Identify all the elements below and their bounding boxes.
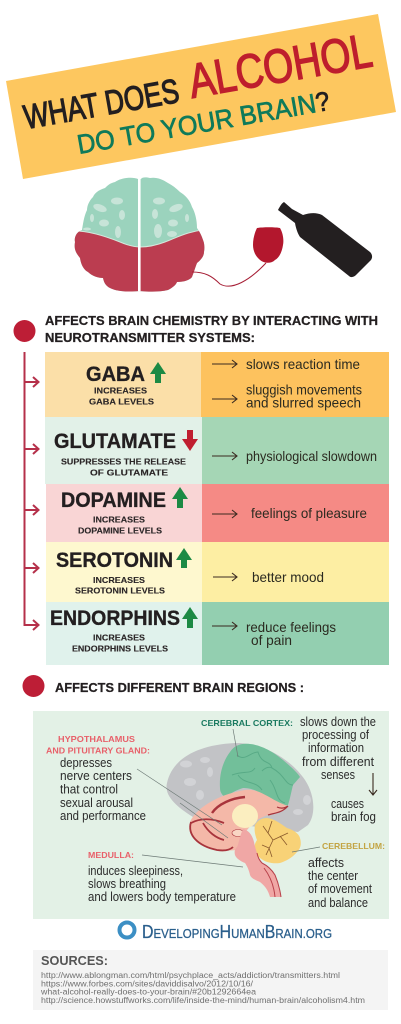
effect <box>213 573 237 581</box>
panel: GABA: and slurred speech <box>246 394 361 410</box>
panel: ENDORPHINS: reduce feelings <box>246 619 336 635</box>
name: ENDORPHINS <box>50 607 180 630</box>
label: hypothalamus: AND PITUITARY GLAND: <box>46 746 150 756</box>
name: DOPAMINE <box>61 489 166 512</box>
cerebral cortex <box>220 744 300 806</box>
text: cortex effect: processing of <box>302 728 369 742</box>
section dot 1 <box>14 320 36 342</box>
brain stem <box>235 829 281 897</box>
section dot 2 <box>22 675 44 697</box>
text: hypothalamus effect: and performance <box>60 809 146 823</box>
icon: up arrow <box>172 487 188 508</box>
icon: down arrow <box>182 430 198 451</box>
description: SUPPRESSES THE RELEASE <box>61 456 186 466</box>
limbic system <box>190 790 288 850</box>
description: INCREASES <box>93 575 145 585</box>
icon: brain <box>74 177 204 292</box>
sources list: http://science.howstuffworks.com/life/inside-the-mind/human-brain/alcoholism4.htm <box>41 996 365 1005</box>
label: medulla: MEDULLA: <box>88 850 134 860</box>
panel: SEROTONIN: better mood <box>252 569 324 585</box>
brain diagram <box>167 743 313 897</box>
panel: GABA: sluggish movements <box>246 382 362 398</box>
text: cerebellum effect: the center <box>308 869 358 883</box>
text: cortex effect: slows down the <box>300 715 376 729</box>
text: cortex effect: brain fog <box>331 810 376 824</box>
effects <box>212 360 237 403</box>
panel: ENDORPHINS: of pain <box>251 632 292 648</box>
thalamus <box>232 804 258 828</box>
description: ENDORPHINS LEVELS <box>72 644 168 654</box>
outer brain <box>167 743 313 832</box>
sources list: http://www.ablongman.com/html/psychplace_acts/addiction/transmitters.html <box>41 971 340 980</box>
panel: GLUTAMATE: physiological slowdown <box>246 448 377 464</box>
sources list: https://www.forbes.com/sites/daviddisalvo/2012/10/16/ <box>41 980 254 988</box>
panel: GABA <box>45 352 389 417</box>
icon: up arrow <box>182 607 198 628</box>
arrow: leads to brain fog <box>369 773 377 795</box>
panel: sources <box>33 950 388 1010</box>
name: SEROTONIN <box>56 549 173 572</box>
name: GLUTAMATE <box>54 430 176 453</box>
icon: wine glass <box>253 227 283 263</box>
pointer lines <box>137 729 320 867</box>
label: hypothalamus: HYPOTHALAMUS <box>58 734 135 744</box>
panel: DOPAMINE <box>46 484 389 542</box>
description: GABA LEVELS <box>89 396 154 406</box>
sources list: what-alcohol-really-does-to-your-brain/#20b1292664ea <box>40 988 257 996</box>
icon: tube <box>192 263 266 286</box>
title line: do to your brain: DO TO YOUR BRAIN? <box>75 86 332 160</box>
icon: up arrow <box>176 548 192 568</box>
text: cortex effect: senses <box>321 768 355 782</box>
sources heading: SOURCES: <box>41 953 108 968</box>
title banner <box>6 14 396 179</box>
text: hypothalamus effect: sexual arousal <box>60 796 133 810</box>
text: medulla effect: and lowers body temperature <box>88 890 236 904</box>
panel: ENDORPHINS <box>46 602 389 665</box>
text: cerebellum effect: affects <box>308 856 344 870</box>
panel: DOPAMINE: feelings of pleasure <box>251 505 367 521</box>
panel: GLUTAMATE <box>45 417 389 484</box>
panel: brain regions <box>33 711 389 919</box>
icon: wine bottle <box>278 202 372 277</box>
title line: what does: WHAT DOES <box>21 72 182 137</box>
text: cortex effect: from different <box>302 755 375 769</box>
text: medulla effect: induces sleepiness, <box>88 864 183 878</box>
text: hypothalamus effect: depresses <box>60 756 112 770</box>
name: GABA <box>86 363 145 386</box>
text: cortex effect: causes <box>331 797 364 811</box>
description: INCREASES <box>93 514 145 524</box>
logo <box>120 922 332 942</box>
description: INCREASES <box>93 632 145 642</box>
text: cortex effect: information <box>308 741 364 755</box>
effect <box>212 622 237 630</box>
label: cerebellum: CEREBELLUM: <box>322 841 385 851</box>
description: DOPAMINE LEVELS <box>78 526 162 536</box>
text: medulla effect: slows breathing <box>88 877 166 891</box>
description: INCREASES <box>94 386 147 396</box>
text: cerebellum effect: and balance <box>308 896 368 910</box>
description: SEROTONIN LEVELS <box>75 586 165 596</box>
label: cerebral cortex: CEREBRAL CORTEX: <box>201 718 293 728</box>
text: hypothalamus effect: nerve centers <box>60 769 132 783</box>
description: OF GLUTAMATE <box>90 468 168 478</box>
cerebellum <box>255 818 301 863</box>
bracket with arrows <box>24 352 38 630</box>
icon: logo ring <box>120 922 134 938</box>
text: hypothalamus effect: that control <box>60 782 118 796</box>
heading: brain chemistry: NEUROTRANSMITTER SYSTEMS: <box>45 331 255 345</box>
panel: SEROTONIN <box>46 542 389 602</box>
logo text: DEVELOPINGHUMANBRAIN.ORG <box>142 922 332 942</box>
text: cerebellum effect: of movement <box>308 882 372 896</box>
icon: brain with wine glass and bottle <box>70 175 372 295</box>
effect <box>212 510 237 518</box>
icon: up arrow <box>150 362 166 383</box>
panel: GABA: slows reaction time <box>246 356 360 372</box>
heading: brain regions: AFFECTS DIFFERENT BRAIN REGIONS : <box>55 681 304 695</box>
effect <box>212 452 237 460</box>
heading: brain chemistry: AFFECTS BRAIN CHEMISTRY BY INTERACTING WITH <box>45 314 378 328</box>
